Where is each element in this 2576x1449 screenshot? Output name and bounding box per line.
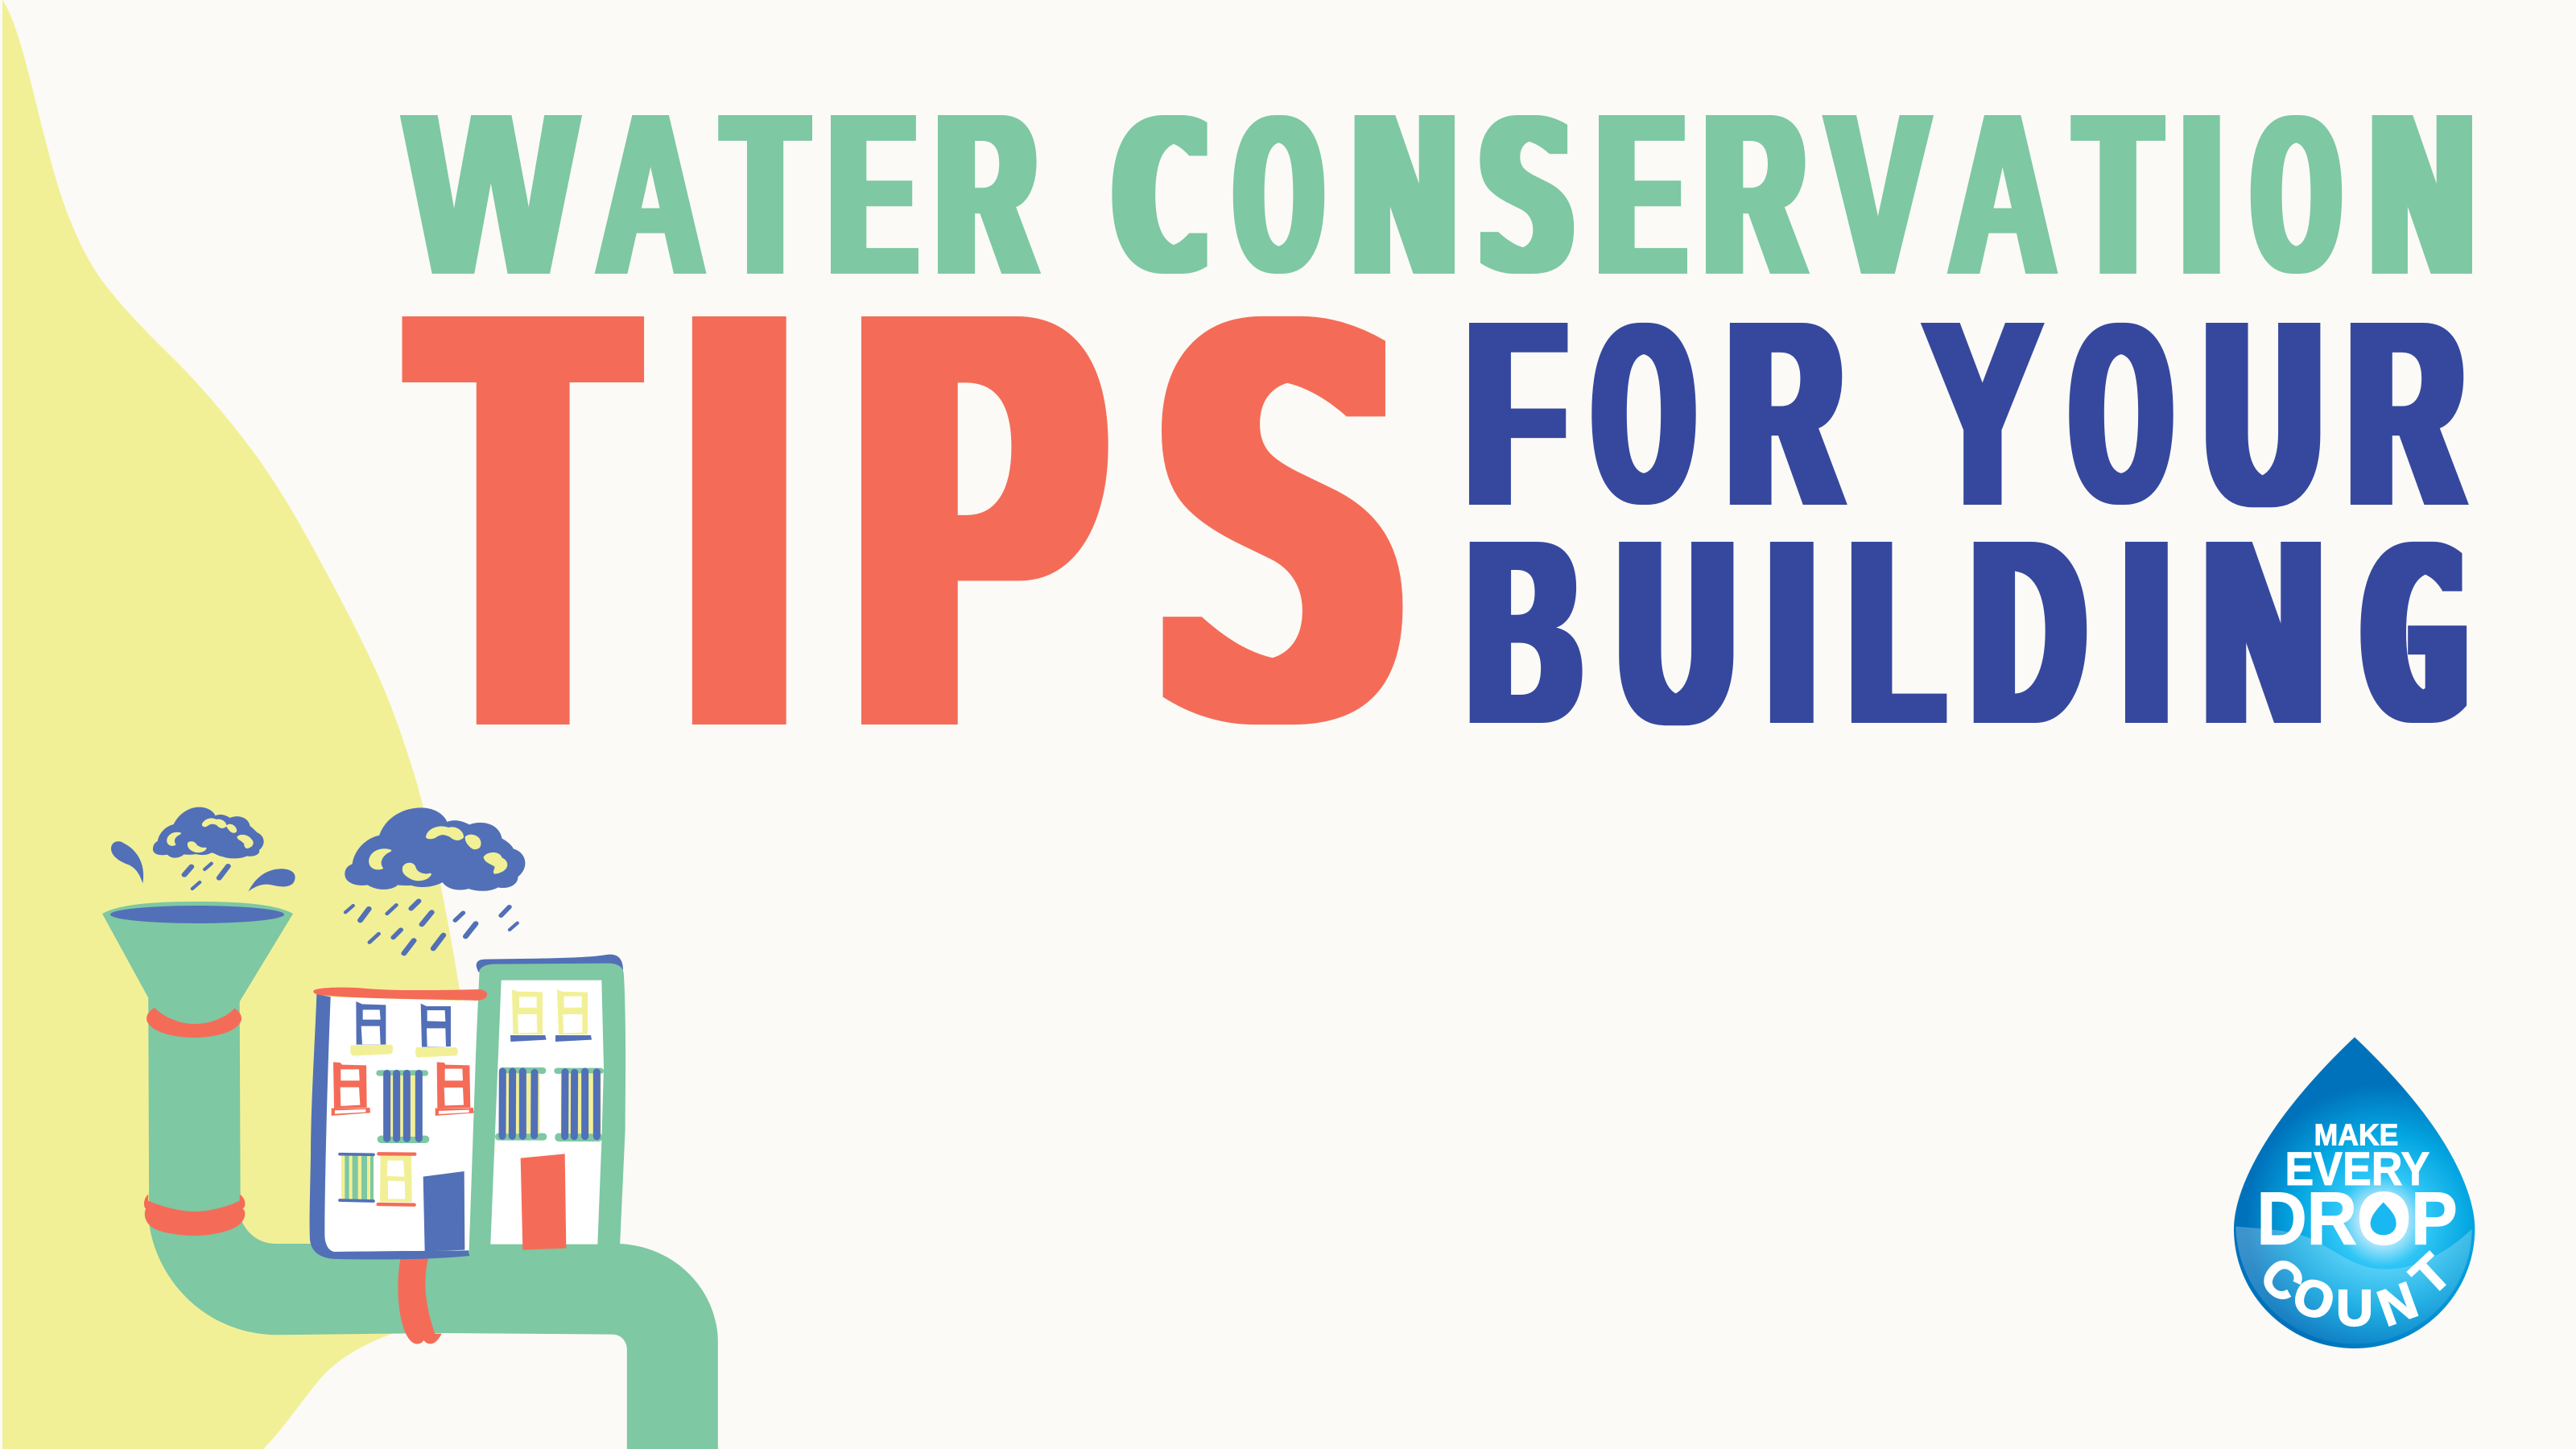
left building door [423,1171,464,1251]
heading: WATER CONSERVATION: C [1108,76,1211,321]
badge text: MAKE: MAKE [2314,1118,2398,1152]
heading: WATER CONSERVATION: T [725,66,805,324]
badge text: COUNT: N [2371,1271,2425,1337]
badge: Make Every Drop Count water drop [2234,1037,2475,1348]
drop wave highlight [2235,1226,2472,1344]
badge text: COUNT: T [2400,1243,2462,1306]
heading: FOR YOUR: O [2064,278,2178,559]
heading: BUILDING: G [2360,497,2466,777]
small cloud rain [184,864,228,889]
drop shape [2234,1037,2475,1348]
title block [406,66,2473,855]
heading: FOR YOUR [1468,266,2462,563]
heading: WATER CONSERVATION: A [1949,66,2056,324]
large cloud [345,807,525,891]
coral windows [332,1062,474,1116]
heading: WATER CONSERVATION: T [2078,66,2158,324]
heading: FOR YOUR: R [1729,266,1841,563]
heading: WATER CONSERVATION: S [1479,76,1575,321]
heading: WATER CONSERVATION: N [1354,66,1455,324]
right building upper windows [512,989,588,1034]
heading: WATER CONSERVATION: V [1827,66,1930,324]
heading: TIPS: I [692,191,786,855]
yellow window [378,1154,415,1205]
heading: WATER CONSERVATION: R [1706,66,1804,324]
upper pipe clamp [147,999,242,1038]
heading: WATER CONSERVATION: E [1599,66,1683,324]
heading: WATER CONSERVATION: O [1228,76,1329,321]
left splash drop [111,841,143,883]
right building barred windows [495,1067,604,1141]
heading: WATER CONSERVATION: O [2246,76,2347,321]
heading: FOR YOUR: Y [1924,266,2041,563]
right splash drop [249,869,295,891]
right building [467,955,625,1250]
heading: FOR YOUR: R [2350,266,2462,563]
badge text: COUNT [2250,1243,2462,1337]
heading: TIPS: S [1154,215,1409,847]
heading: FOR YOUR: O [1587,278,1701,559]
badge text: COUNT: O [2286,1265,2342,1332]
heading: FOR YOUR: U [2206,266,2320,563]
left building [310,988,487,1260]
pipe [148,998,718,1449]
drop-shaped counter in the O [2368,1199,2399,1237]
illustration: buildings [310,955,625,1260]
illustration: pipe with funnel [102,902,718,1449]
right building door [521,1154,566,1250]
lower pipe clamp [144,1194,245,1236]
heading: BUILDING: U [1619,486,1733,781]
heading: BUILDING: B [1469,486,1579,781]
heading: WATER CONSERVATION: R [938,66,1035,324]
green barred window [340,1154,374,1201]
funnel [102,902,293,1024]
heading: BUILDING: D [1973,486,2083,781]
vertical pipe clamp [398,1258,442,1344]
heading: TIPS: T [421,191,625,855]
top blue windows [356,1001,451,1047]
heading: FOR YOUR: F [1468,266,1564,563]
badge text: COUNT: C [2250,1246,2314,1313]
roof [313,988,487,1001]
heading: WATER CONSERVATION: A [597,66,704,324]
heading: WATER CONSERVATION [406,66,2473,324]
small cloud [153,807,264,858]
heading: BUILDING: I [2124,486,2169,781]
badge text: EVERY: EVERY [2285,1142,2429,1195]
funnel opening [110,906,284,923]
yellow background blob [2,0,475,1449]
heading: BUILDING: N [2205,486,2322,781]
middle barred window [376,1070,429,1143]
heading: WATER CONSERVATION: I [2183,66,2220,324]
heading: WATER CONSERVATION: E [832,66,914,324]
heading: BUILDING [1469,486,2466,781]
badge text: COUNT: U [2336,1280,2373,1336]
heading: TIPS: P [860,191,1098,855]
heading: BUILDING: L [1852,486,1942,781]
badge text: DROP: DROP [2256,1176,2458,1260]
heading: TIPS [421,191,1409,855]
heading: WATER CONSERVATION: W [406,66,578,324]
illustration: clouds, rain and splashes [111,807,525,953]
heading: BUILDING: I [1769,486,1815,781]
large cloud rain [345,901,518,953]
heading: WATER CONSERVATION: N [2372,66,2473,324]
